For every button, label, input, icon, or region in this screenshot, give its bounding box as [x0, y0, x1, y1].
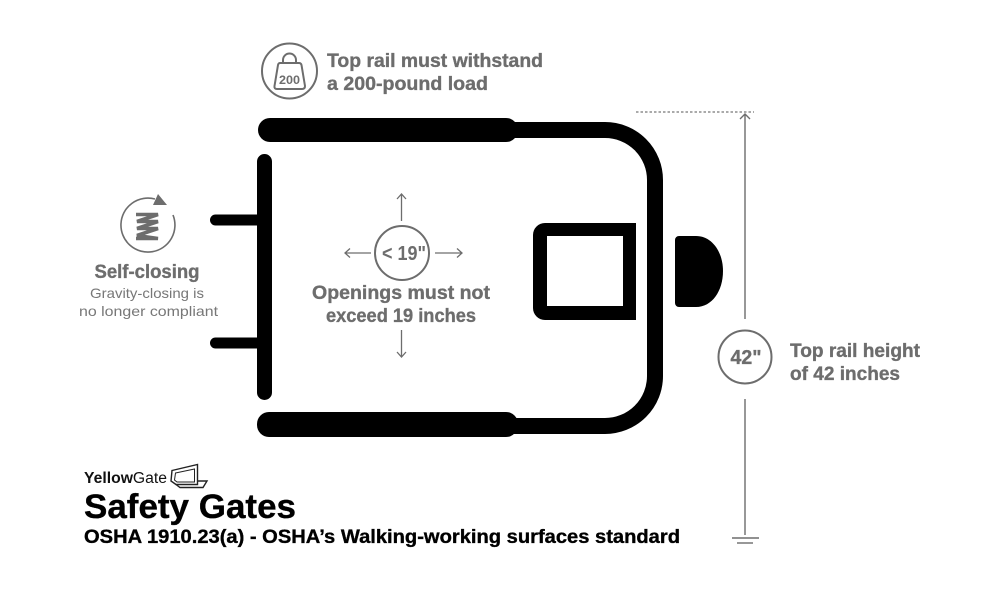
icon: weight — [262, 44, 317, 98]
description: Gravity-closing is — [90, 285, 204, 301]
bottom rail grip — [257, 412, 518, 437]
title: Safety Gates — [84, 488, 296, 526]
callout: 200-pound load — [262, 44, 548, 98]
dimension line — [636, 112, 759, 543]
icon: circle with arrows — [345, 194, 462, 357]
gate diagram — [216, 118, 723, 437]
brand and title block — [84, 464, 680, 548]
callout: 42 inch height dimension — [636, 112, 925, 543]
top and bottom rail frame — [510, 130, 655, 426]
icon: circle with arrows: < 19" — [382, 243, 426, 265]
callout text: exceed 19 inches — [326, 306, 476, 327]
gate bar — [257, 154, 272, 400]
callout: self-closing — [79, 194, 218, 319]
latch plate — [533, 223, 636, 320]
callout: openings under 19 inches — [312, 194, 495, 357]
upper hinge — [216, 214, 262, 226]
subtitle: OSHA 1910.23(a) - OSHA’s Walking-working surfaces standard — [84, 527, 680, 548]
callout text: Top rail height — [790, 341, 921, 362]
callout text: Top rail must withstand — [327, 51, 543, 72]
description: no longer compliant — [79, 303, 218, 319]
icon: weight: 200 — [279, 75, 300, 87]
logo: YellowGate — [84, 470, 167, 487]
mounting bump — [675, 236, 723, 307]
lower hinge — [216, 338, 262, 348]
logo — [84, 464, 207, 488]
height badge: 42" — [730, 347, 762, 369]
top rail grip — [258, 118, 518, 142]
callout text: of 42 inches — [790, 364, 900, 385]
callout text: a 200-pound load — [327, 74, 488, 95]
height badge — [718, 330, 772, 384]
callout text: Openings must not — [312, 283, 491, 304]
heading: Self-closing — [94, 262, 200, 283]
icon: spring with rotation arrow — [121, 194, 175, 252]
